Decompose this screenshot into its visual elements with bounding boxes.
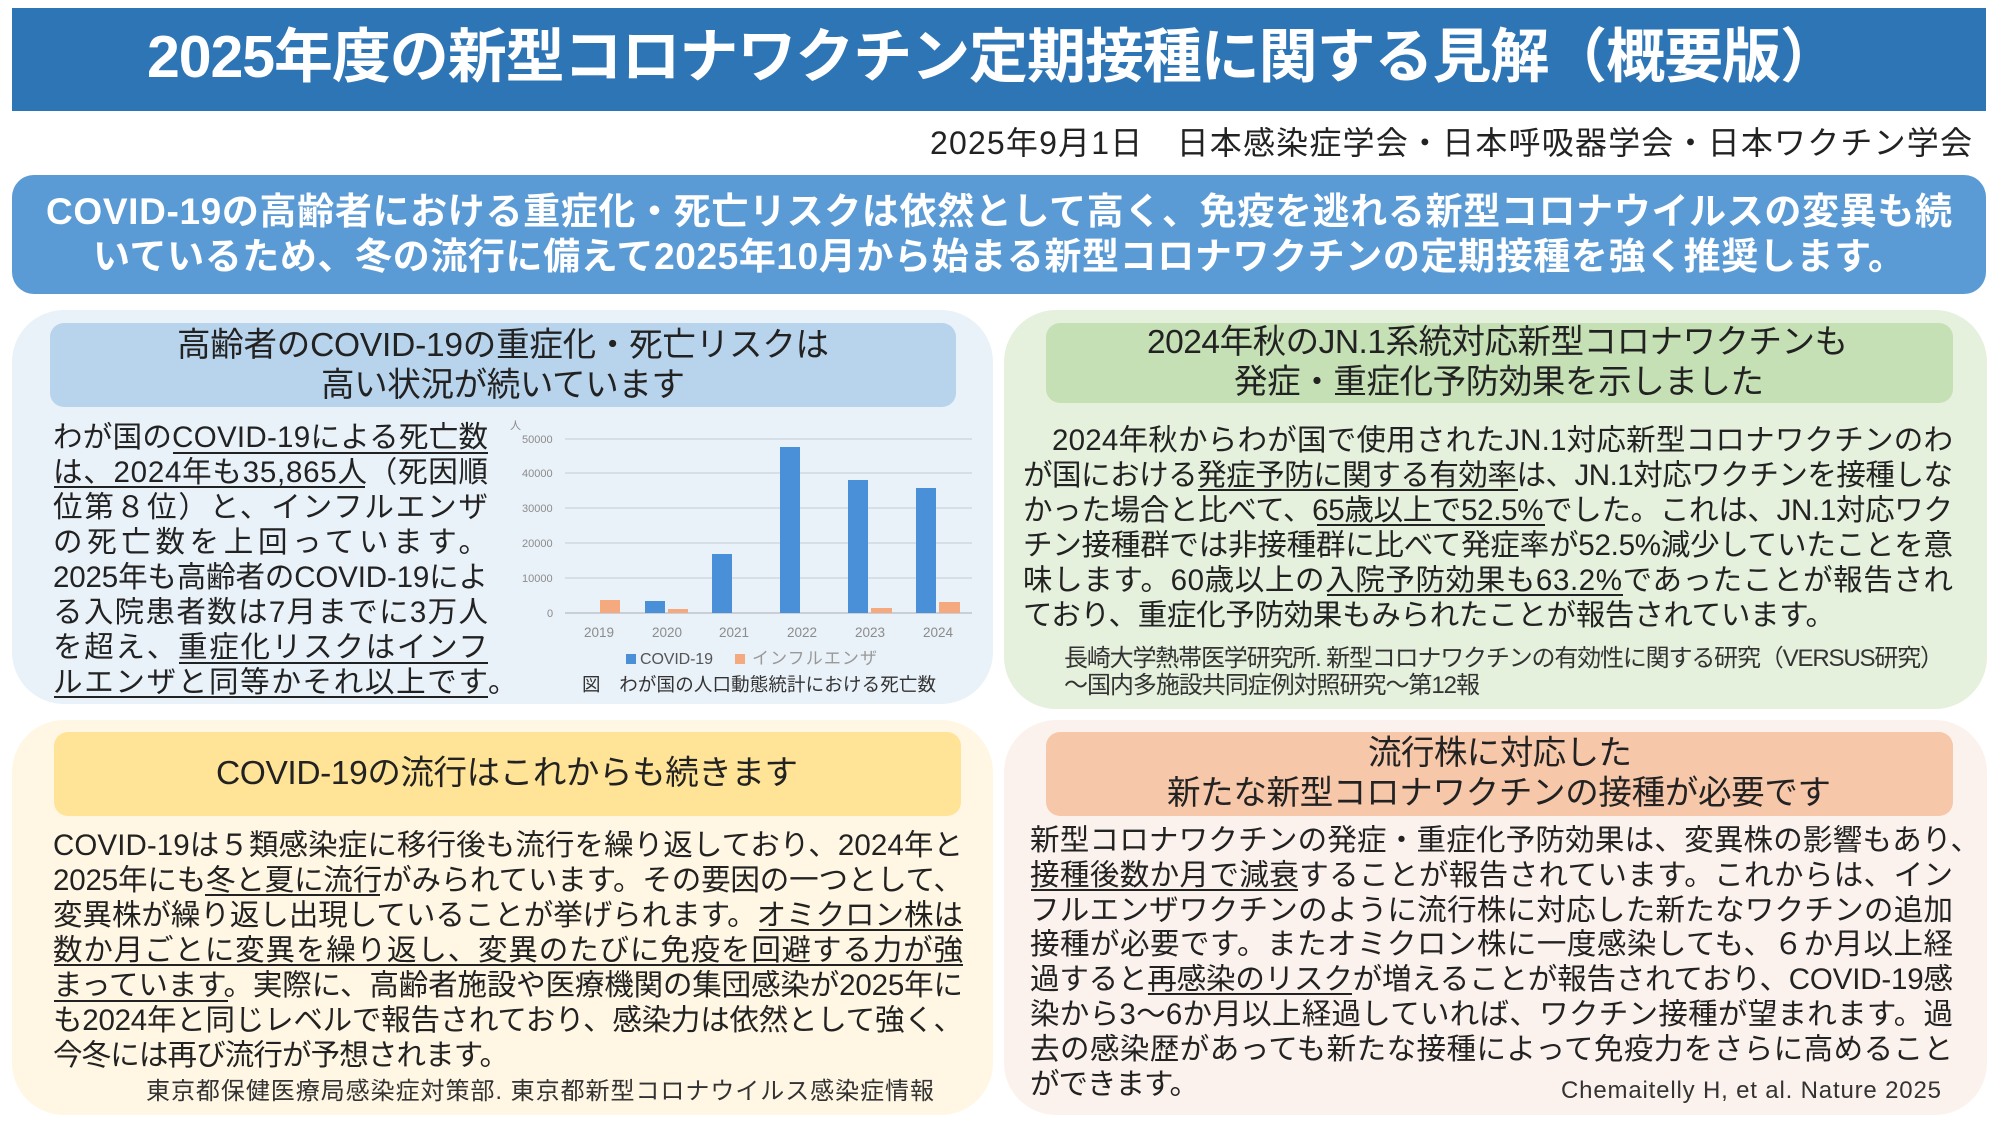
bar chart: deaths by year: COVID-19 <box>640 651 713 668</box>
body text: death counts: 2025年も高齢者のCOVID-19によ <box>53 561 488 594</box>
panel heading: epidemic continues <box>54 732 961 816</box>
body text: epidemic continues: 今冬には再び流行が予想されます。 <box>53 1039 509 1072</box>
bar chart: deaths by year: 2022 <box>787 625 817 640</box>
bar chart: deaths by year: 図 わが国の人口動態統計における死亡数 <box>582 674 936 695</box>
body text: death counts: 。 <box>488 666 518 699</box>
reference: VERSUS study <box>1064 645 1944 699</box>
key message banner: いているため、冬の流行に備えて2025年10月から始まる新型コロナワクチンの定期接種を強く推奨します。 <box>93 236 1905 277</box>
key message banner: COVID-19の高齢者における重症化・死亡リスクは依然として高く、免疫を逃れる新型コロナウイルスの変異も続 <box>46 191 1952 232</box>
title bar <box>12 8 1986 111</box>
date and societies: 2025年9月1日 日本感染症学会・日本呼吸器学会・日本ワクチン学会 <box>930 125 1972 161</box>
body text: updated vaccine: 接種が必要です。またオミクロン株に一度感染しても、６か月以上経 <box>1030 928 1953 961</box>
panel heading: severity and death risk <box>50 323 956 407</box>
body text: updated vaccine: 去の感染歴があっても新たな接種によって免疫力をさらに高めること <box>1030 1033 1953 1066</box>
bar chart: deaths by year <box>510 420 972 695</box>
panel: severity and death risk <box>12 310 993 704</box>
body text: effectiveness results: ており、重症化予防効果もみられたことが報告されています。 <box>1023 599 1835 632</box>
panel heading: epidemic continues: COVID-19の流行はこれからも続きます <box>216 755 798 792</box>
body text: effectiveness results <box>1023 424 1953 632</box>
bar chart: deaths by year: インフルエンザ <box>752 649 877 668</box>
panel: JN.1 vaccine effectiveness <box>1004 310 1987 709</box>
panel heading: severity and death risk: 高い状況が続いています <box>321 367 685 404</box>
panel heading: severity and death risk: 高齢者のCOVID-19の重症化・死亡リスクは <box>177 327 829 364</box>
panel heading: JN.1 vaccine effectiveness: 発症・重症化予防効果を示しました <box>1234 364 1764 401</box>
body text: updated vaccine: フルエンザワクチンのように流行株に対応した新たなワクチンの追加 <box>1030 894 1953 927</box>
body text: death counts: る入院患者数は7月までに3万人 <box>53 596 488 629</box>
bar chart: deaths by year: 2020 <box>652 625 682 640</box>
body text: effectiveness results: が国における発症予防に関する有効率は、JN.1対応ワクチンを接種しな <box>1023 459 1953 492</box>
body text: death counts: を超え、重症化リスクはインフ <box>53 631 488 664</box>
body text: effectiveness results: 2024年秋からわが国で使用されたJN.1対応新型コロナワクチンのわ <box>1052 424 1953 457</box>
reference: VERSUS study: ～国内多施設共同症例対照研究～第12報 <box>1064 672 1480 699</box>
panel heading: JN.1 vaccine effectiveness: 2024年秋のJN.1系統対応新型コロナワクチンも <box>1147 324 1848 361</box>
body text: death counts: 位第８位）と、インフルエンザ <box>53 491 488 524</box>
body text: death counts: わが国のCOVID-19による死亡数 <box>53 421 488 454</box>
body text: updated vaccine <box>1030 824 1980 1101</box>
body text: effectiveness results: かった場合と比べて、65歳以上で52.5%でした。これは、JN.1対応ワク <box>1023 494 1953 527</box>
body text: death counts <box>53 421 518 699</box>
body text: updated vaccine: 過すると再感染のリスクが増えることが報告されており、COVID-19感 <box>1030 963 1953 996</box>
body text: death counts: は、2024年も35,865人（死因順 <box>53 456 488 489</box>
body text: effectiveness results: チン接種群では非接種群に比べて発症率が52.5%減少していたことを意 <box>1023 529 1953 562</box>
body text: epidemic continues: COVID-19は５類感染症に移行後も流行を繰り返しており、2024年と <box>53 829 963 862</box>
body text: updated vaccine: 新型コロナワクチンの発症・重症化予防効果は、変異株の影響もあり、 <box>1030 824 1980 857</box>
body text: epidemic continues: も2024年と同じレベルで報告されており、感染力は依然として強く、 <box>53 1004 963 1037</box>
bar chart: deaths by year: 2021 <box>719 625 749 640</box>
reference: VERSUS study: 長崎大学熱帯医学研究所. 新型コロナワクチンの有効性に関する研究（VERSUS研究） <box>1064 645 1944 672</box>
title bar: 2025年度の新型コロナワクチン定期接種に関する見解（概要版） <box>147 24 1839 90</box>
bar chart: deaths by year: 2019 <box>584 625 614 640</box>
body text: epidemic continues: 2025年にも冬と夏に流行がみられています。その要因の一つとして、 <box>53 864 963 897</box>
panel heading: JN.1 vaccine effectiveness <box>1046 323 1953 403</box>
body text: death counts: ルエンザと同等かそれ以上です <box>53 666 488 699</box>
body text: epidemic continues: 数か月ごとに変異を繰り返し、変異のたびに免疫を回避する力が強 <box>53 934 963 967</box>
bar chart: deaths by year: 2023 <box>855 625 885 640</box>
bar chart: deaths by year: 10000 <box>522 573 553 585</box>
bar chart: deaths by year: 30000 <box>522 503 553 515</box>
panel heading: need for updated vaccine: 新たな新型コロナワクチンの接種が必要です <box>1167 775 1831 812</box>
bar chart: deaths by year: 0 <box>547 608 553 620</box>
body text: updated vaccine: 染から3～6か月以上経過していれば、ワクチン接種が望まれます。過 <box>1030 998 1953 1031</box>
panel: need for updated vaccine <box>1004 720 1987 1115</box>
bar chart: deaths by year: 50000 <box>522 434 553 446</box>
body text: updated vaccine: 接種後数か月で減衰することが報告されています。これからは、イン <box>1030 859 1953 892</box>
reference: Tokyo metropolitan data: 東京都保健医療局感染症対策部. 東京都新型コロナウイルス感染症情報 <box>146 1078 934 1105</box>
body text: epidemic continues <box>53 829 963 1072</box>
body text: epidemic continues: 変異株が繰り返し出現していることが挙げられます。オミクロン株は <box>53 899 963 932</box>
reference: Nature 2025: Chemaitelly H, et al. Nature 2025 <box>1561 1077 1941 1104</box>
body text: epidemic continues: まっています。実際に、高齢者施設や医療機関の集団感染が2025年に <box>53 969 963 1002</box>
bar chart: deaths by year: 40000 <box>522 468 553 480</box>
panel heading: need for updated vaccine: 流行株に対応した <box>1368 735 1632 772</box>
bar chart: deaths by year: 2024 <box>923 625 954 640</box>
panel: epidemic continues <box>12 720 993 1115</box>
bar chart: deaths by year: 人 <box>510 420 521 432</box>
bar chart: deaths by year: 20000 <box>522 538 553 550</box>
key message banner <box>12 175 1986 294</box>
panel heading: need for updated vaccine <box>1046 732 1953 816</box>
body text: updated vaccine: ができます。 <box>1030 1068 1199 1101</box>
body text: effectiveness results: 味します。60歳以上の入院予防効果も63.2%であったことが報告され <box>1023 564 1953 597</box>
body text: death counts: の死亡数を上回っています。 <box>53 526 488 559</box>
